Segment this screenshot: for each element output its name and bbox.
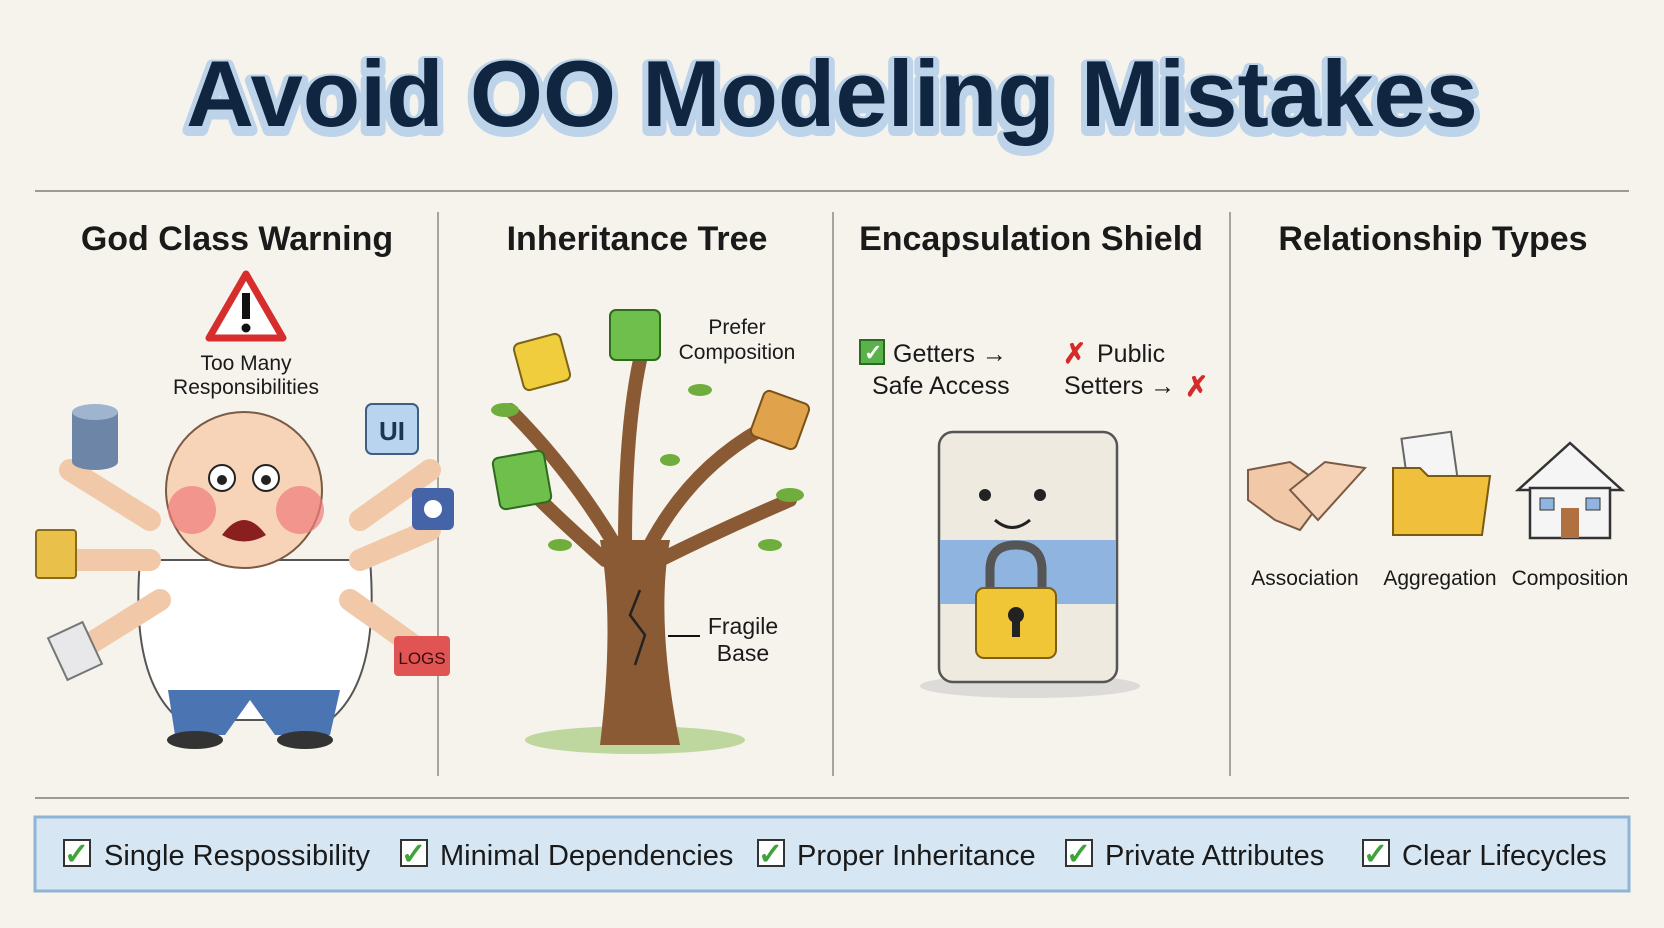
text: getters safe access: Getters → [893, 340, 1007, 368]
bottom banner: checklist [35, 817, 1629, 891]
text: prefer composition: Composition [679, 341, 795, 364]
bottom banner: checklist: Minimal Dependencies [440, 840, 733, 872]
heading: God Class Warning: God Class Warning [81, 220, 393, 258]
icon: folder with documents [1393, 432, 1490, 535]
title: Avoid OO Modeling Mistakes [186, 45, 1478, 150]
icon: safe with lock [920, 432, 1140, 698]
text: too many responsibilities: Responsibilities [173, 376, 319, 399]
icon: orange puzzle [749, 389, 811, 451]
labels: relationship types [1251, 567, 1628, 590]
text: getters safe access: ✓ [864, 340, 882, 365]
bottom banner: checklist: Private Attributes [1105, 840, 1324, 872]
title: Avoid OO Modeling Mistakes [186, 41, 1478, 146]
text: public setters: Setters → [1064, 372, 1175, 400]
text: prefer composition: Prefer [708, 316, 766, 339]
icon: logs tag: LOGS [398, 649, 446, 668]
panel: relationship types [1248, 220, 1628, 590]
callout: fragile base [668, 613, 778, 666]
bottom banner: checklist: Single Respossibility [104, 840, 370, 872]
text: getters safe access [860, 340, 1010, 400]
icon: house [1518, 443, 1622, 538]
text: public setters: Public [1097, 340, 1165, 368]
icon: tree [491, 360, 804, 754]
labels: relationship types: Association [1251, 567, 1359, 590]
text: getters safe access: Safe Access [872, 372, 1010, 400]
bottom banner: checklist: ✓ [64, 838, 89, 871]
icon: green puzzle top [610, 310, 660, 360]
icon: yellow puzzle [513, 333, 571, 391]
panel: god class [36, 220, 454, 749]
icon: database [72, 404, 118, 470]
bottom banner: checklist: ✓ [401, 838, 426, 871]
text: too many responsibilities: Too Many [200, 352, 292, 375]
bottom banner: checklist: ✓ [758, 838, 783, 871]
callout: fragile base: Base [717, 640, 769, 666]
bottom banner: checklist: Proper Inheritance [797, 840, 1036, 872]
bottom banner: checklist: Clear Lifecycles [1402, 840, 1607, 872]
icon: god class character [60, 412, 430, 749]
icon: logs tag [394, 636, 450, 676]
labels: relationship types: Composition [1512, 567, 1628, 590]
icon: warning triangle [209, 274, 283, 338]
icon: folder [36, 530, 76, 578]
bottom banner: checklist: ✓ [1066, 838, 1091, 871]
heading: Relationship Types: Relationship Types [1278, 220, 1588, 258]
bottom banner: checklist: ✓ [1363, 838, 1388, 871]
heading: Inheritance Tree: Inheritance Tree [507, 220, 767, 258]
icon: handshake [1248, 462, 1365, 530]
icon: green puzzle left [492, 450, 552, 510]
labels: relationship types: Aggregation [1383, 567, 1497, 590]
icon: document [48, 622, 102, 680]
text: public setters: ✗ [1185, 371, 1208, 402]
panel: inheritance tree [491, 220, 811, 754]
callout: fragile base: Fragile [708, 613, 778, 639]
panel: encapsulation shield [859, 220, 1208, 698]
text: public setters: ✗ [1063, 338, 1086, 369]
icon: gear box [412, 488, 454, 530]
heading: Encapsulation Shield: Encapsulation Shield [859, 220, 1203, 258]
text: public setters [1063, 338, 1208, 402]
icon: UI box [366, 404, 418, 454]
icon: UI box: UI [379, 416, 405, 446]
